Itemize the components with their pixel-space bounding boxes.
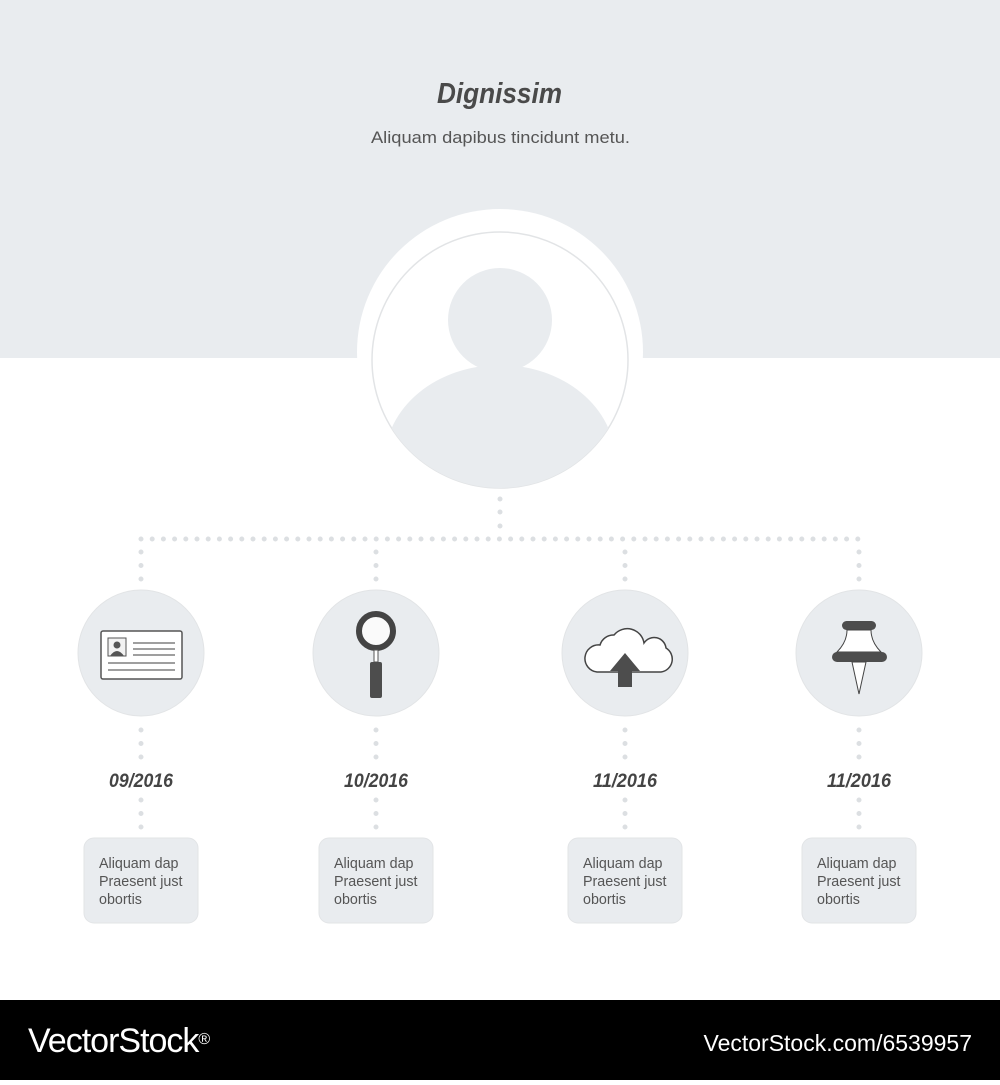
text boxes: obortis [817, 892, 860, 908]
icon: magnifier [313, 590, 439, 716]
footer: VectorStock.com/6539957 [704, 1030, 972, 1056]
text boxes: Aliquam dap [583, 856, 663, 872]
dates: 10/2016 [344, 771, 408, 792]
footer [0, 1000, 1000, 1080]
footer: VectorStock® [28, 1022, 210, 1060]
dates: 11/2016 [593, 771, 657, 792]
text boxes: Aliquam dap [817, 856, 897, 872]
header background [0, 0, 1000, 358]
text boxes: Praesent just [817, 874, 900, 890]
dotted connectors [141, 496, 859, 828]
icon: id card [78, 590, 204, 716]
avatar circle [357, 209, 643, 489]
icon: cloud upload [562, 590, 688, 716]
text boxes: obortis [99, 892, 142, 908]
dates [109, 771, 891, 792]
text boxes: obortis [583, 892, 626, 908]
text boxes: Aliquam dap [99, 856, 179, 872]
text boxes [84, 838, 916, 923]
icon: push pin [796, 590, 922, 716]
dates: 09/2016 [109, 771, 173, 792]
text boxes: obortis [334, 892, 377, 908]
text boxes: Aliquam dap [334, 856, 414, 872]
text boxes: Praesent just [583, 874, 666, 890]
text boxes: Praesent just [334, 874, 417, 890]
text boxes: Praesent just [99, 874, 182, 890]
dates: 11/2016 [827, 771, 891, 792]
title: Dignissim [437, 78, 562, 110]
subtitle: Aliquam dapibus tincidunt metu. [371, 128, 630, 147]
